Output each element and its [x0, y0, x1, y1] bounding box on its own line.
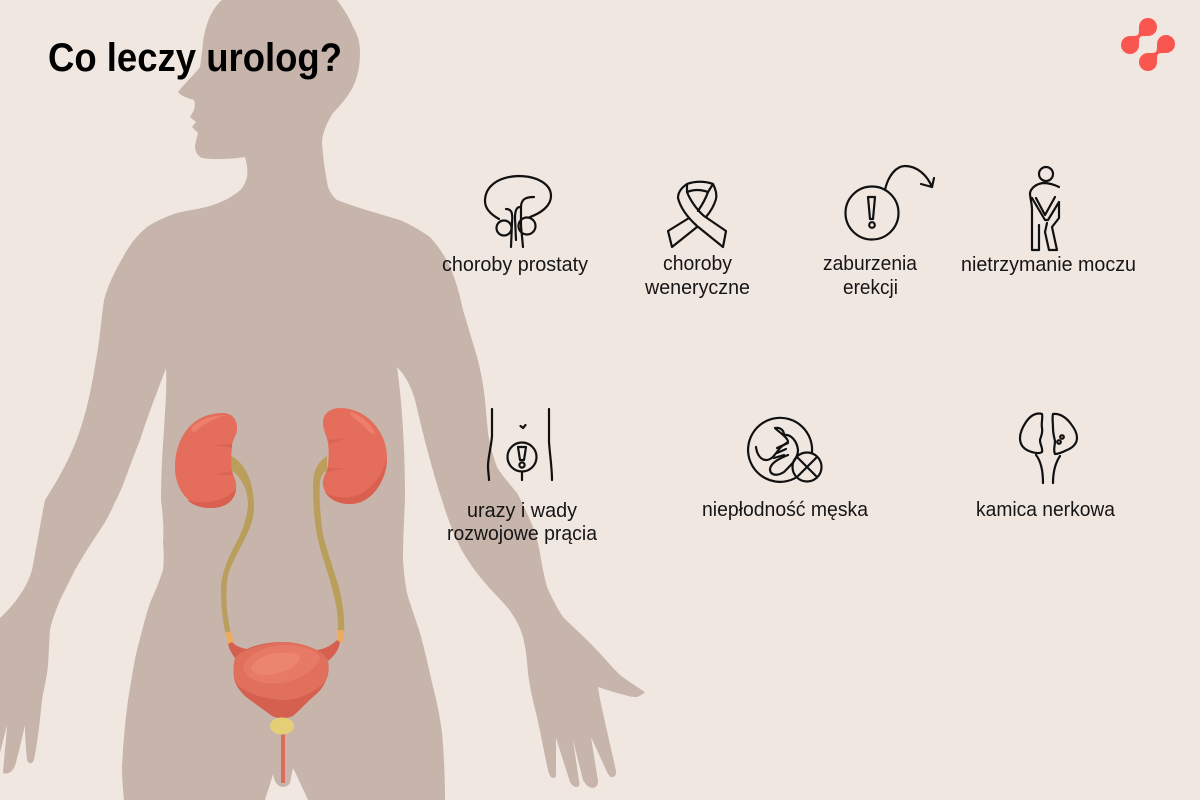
- bladder highlight inner: [252, 653, 300, 675]
- ureter lower tip: [337, 630, 344, 642]
- title: Co leczy urolog?: [48, 36, 342, 80]
- left kidney: [175, 413, 237, 508]
- logo drops: top and left: [1121, 18, 1157, 54]
- icon: kidneys with stone: [1020, 413, 1077, 483]
- icon: warning circle with arrow: [846, 166, 934, 240]
- bladder highlight outer: [243, 645, 320, 683]
- bladder wall: [228, 640, 340, 718]
- label: urazy i wady: [467, 499, 578, 522]
- label: zaburzenia: [823, 252, 918, 275]
- label: choroby: [663, 252, 733, 275]
- prostate: [270, 718, 294, 734]
- body silhouette: [0, 0, 645, 800]
- icon: person: [1030, 167, 1059, 250]
- left kidney highlight: [192, 415, 226, 432]
- right kidney shadow: [325, 458, 387, 504]
- right kidney upper notch: [328, 438, 347, 444]
- icon: sperm and cross: [748, 418, 822, 482]
- left kidney shadow: [187, 489, 236, 508]
- bladder with prostate and urethra: [228, 640, 340, 783]
- right kidney: [323, 408, 387, 504]
- item: choroby prostaty: [442, 176, 589, 276]
- label line 2: rozwojowe prącia: [447, 522, 598, 545]
- urethra: [281, 730, 285, 783]
- ureter lower tip: [225, 631, 234, 645]
- icon: prostate: [485, 176, 551, 247]
- icon: ribbon: [668, 182, 726, 247]
- left kidney and ureter: [175, 413, 254, 645]
- item: choroby weneryczne: [644, 182, 750, 299]
- logo: [1121, 18, 1175, 71]
- icon: lower abdomen: [488, 409, 552, 480]
- right kidney and ureter: [313, 408, 387, 642]
- item: niepłodność męska: [702, 418, 869, 521]
- left kidney lower notch: [213, 471, 233, 475]
- left kidney upper notch: [213, 444, 232, 448]
- item: nietrzymanie moczu: [961, 167, 1136, 276]
- right kidney lower notch: [327, 468, 347, 472]
- label: niepłodność męska: [702, 498, 869, 521]
- item: kamica nerkowa: [976, 413, 1116, 521]
- label: kamica nerkowa: [976, 498, 1116, 521]
- logo drops: right and bottom: [1139, 35, 1175, 71]
- label line 2: erekcji: [843, 276, 898, 299]
- bladder mid tone: [234, 642, 328, 700]
- item: zaburzenia erekcji: [823, 166, 934, 299]
- ureter: right: [313, 456, 344, 633]
- label line 2: weneryczne: [644, 276, 750, 299]
- label: choroby prostaty: [442, 253, 589, 276]
- ureter: left: [221, 456, 254, 634]
- right kidney highlight: [350, 412, 375, 434]
- label: nietrzymanie moczu: [961, 253, 1136, 276]
- item: urazy i wady rozwojowe prącia: [447, 409, 598, 545]
